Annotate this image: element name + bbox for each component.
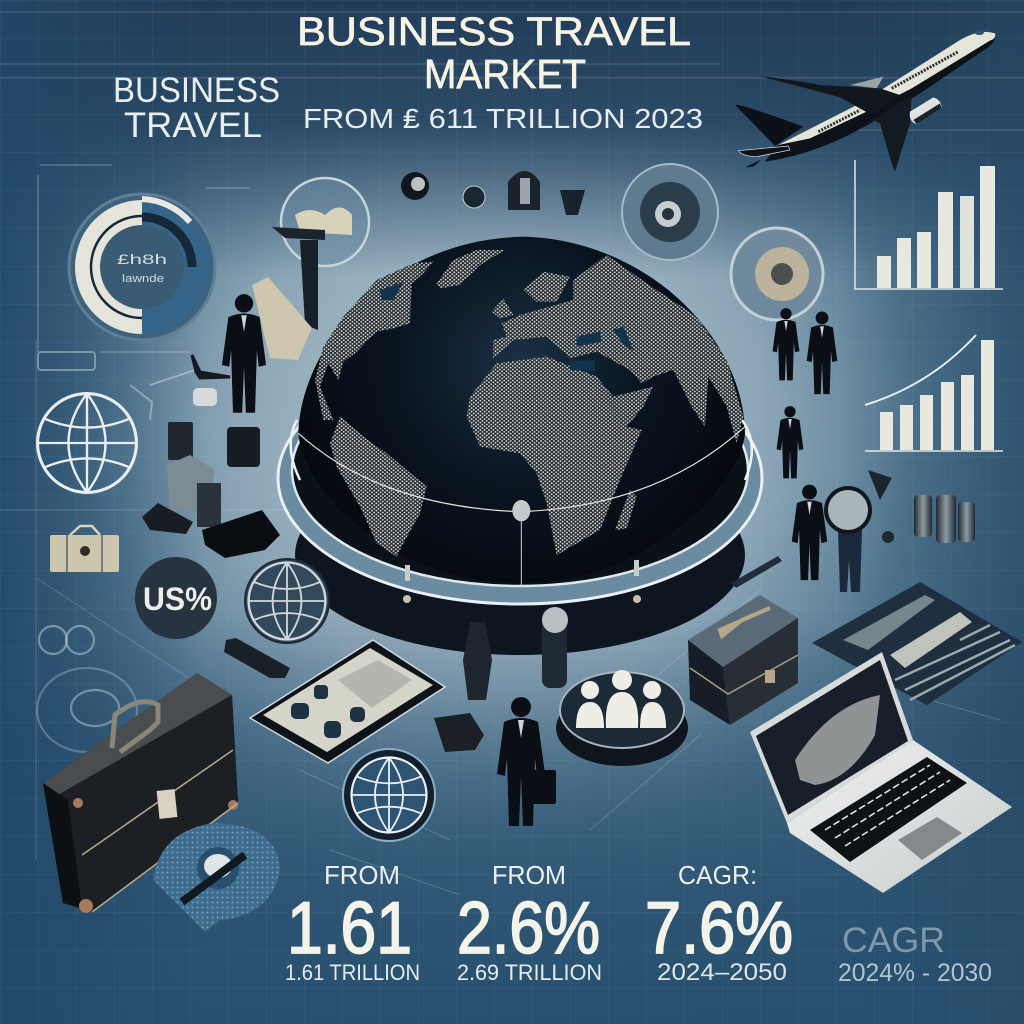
icon: round seal — [731, 228, 823, 320]
globe marker — [512, 500, 530, 521]
bar chart: growth curve — [865, 335, 1003, 451]
stat: 7.6 percent CAGR: 7.6% — [645, 888, 793, 969]
icon: small case — [50, 526, 119, 572]
people group right — [773, 308, 862, 592]
side heading: business travel: BUSINESS — [113, 71, 280, 110]
globe icon centre — [343, 749, 435, 841]
pen tool — [224, 638, 290, 678]
magnifier and canisters — [826, 470, 975, 543]
icon: lens with travel items — [252, 178, 369, 360]
notepad and pen — [153, 823, 280, 932]
landmass: eurasia — [493, 255, 743, 443]
faded CAGR label: CAGR — [842, 921, 945, 960]
briefcase large — [43, 673, 238, 913]
stat: 1.61 trillion: 1.61 — [287, 888, 412, 969]
tablet — [250, 640, 445, 763]
stat: 1.61 trillion — [285, 860, 420, 985]
badge: US%: US% — [143, 581, 212, 617]
stat: 2.6 percent — [457, 860, 602, 985]
stat: 2.6 percent: 2.6% — [457, 888, 600, 969]
stat: 7.6 percent CAGR: CAGR: — [678, 860, 757, 890]
faint wireframe sketch — [38, 165, 250, 420]
bar chart: top right — [855, 160, 1003, 289]
globe base and rings — [278, 352, 762, 655]
faded CAGR label: 2024% - 2030 — [838, 959, 992, 987]
globe dome with dotted continents — [298, 237, 745, 587]
ring highlight — [291, 420, 752, 480]
swirl items left — [37, 626, 137, 752]
small bottles centre — [434, 607, 568, 752]
landmass: north america — [315, 262, 433, 420]
badge: people — [556, 670, 688, 766]
pen right — [731, 556, 782, 588]
landmass: british isles — [492, 298, 513, 318]
stat: 7.6 percent CAGR — [645, 860, 793, 986]
landmass: greenland — [437, 250, 505, 288]
main title: FROM ₤ 611 TRILLION 2023 — [303, 103, 703, 134]
stat: 1.61 trillion: FROM — [324, 860, 400, 890]
laptop — [750, 652, 1012, 893]
person left — [222, 294, 266, 413]
main title: MARKET — [424, 51, 586, 97]
donut chart: £h8h — [117, 251, 167, 267]
main title: BUSINESS TRAVEL — [297, 10, 691, 54]
side heading: business travel — [113, 71, 280, 145]
person centre with case — [497, 697, 556, 826]
stat: 2.6 percent: 2.69 TRILLION — [457, 960, 602, 985]
globe icon centre-left — [245, 559, 329, 643]
donut chart — [69, 194, 215, 340]
badge: US% — [135, 557, 217, 639]
equator line — [298, 427, 745, 512]
airplane — [735, 30, 995, 172]
landmass: madagascar — [615, 490, 637, 530]
side heading: business travel: TRAVEL — [124, 106, 262, 145]
icons: top row items — [401, 171, 585, 215]
stat: 1.61 trillion: 1.61 TRILLION — [285, 960, 420, 985]
stat: 2.6 percent: FROM — [492, 860, 566, 890]
inland seas — [380, 282, 633, 423]
stat: 7.6 percent CAGR: 2024–2050 — [657, 959, 787, 986]
document sheet — [812, 582, 1022, 705]
landmass: south america — [330, 417, 427, 557]
donut chart: lawnde — [122, 273, 164, 285]
icon: round lens top right — [622, 164, 718, 260]
globe icon left — [38, 394, 136, 492]
main title — [297, 10, 703, 134]
landmass: africa — [467, 357, 653, 555]
landmass: scandinavia — [523, 272, 570, 302]
travel gear pile — [142, 355, 280, 558]
briefcase right — [688, 595, 798, 725]
faded CAGR label — [838, 921, 992, 987]
